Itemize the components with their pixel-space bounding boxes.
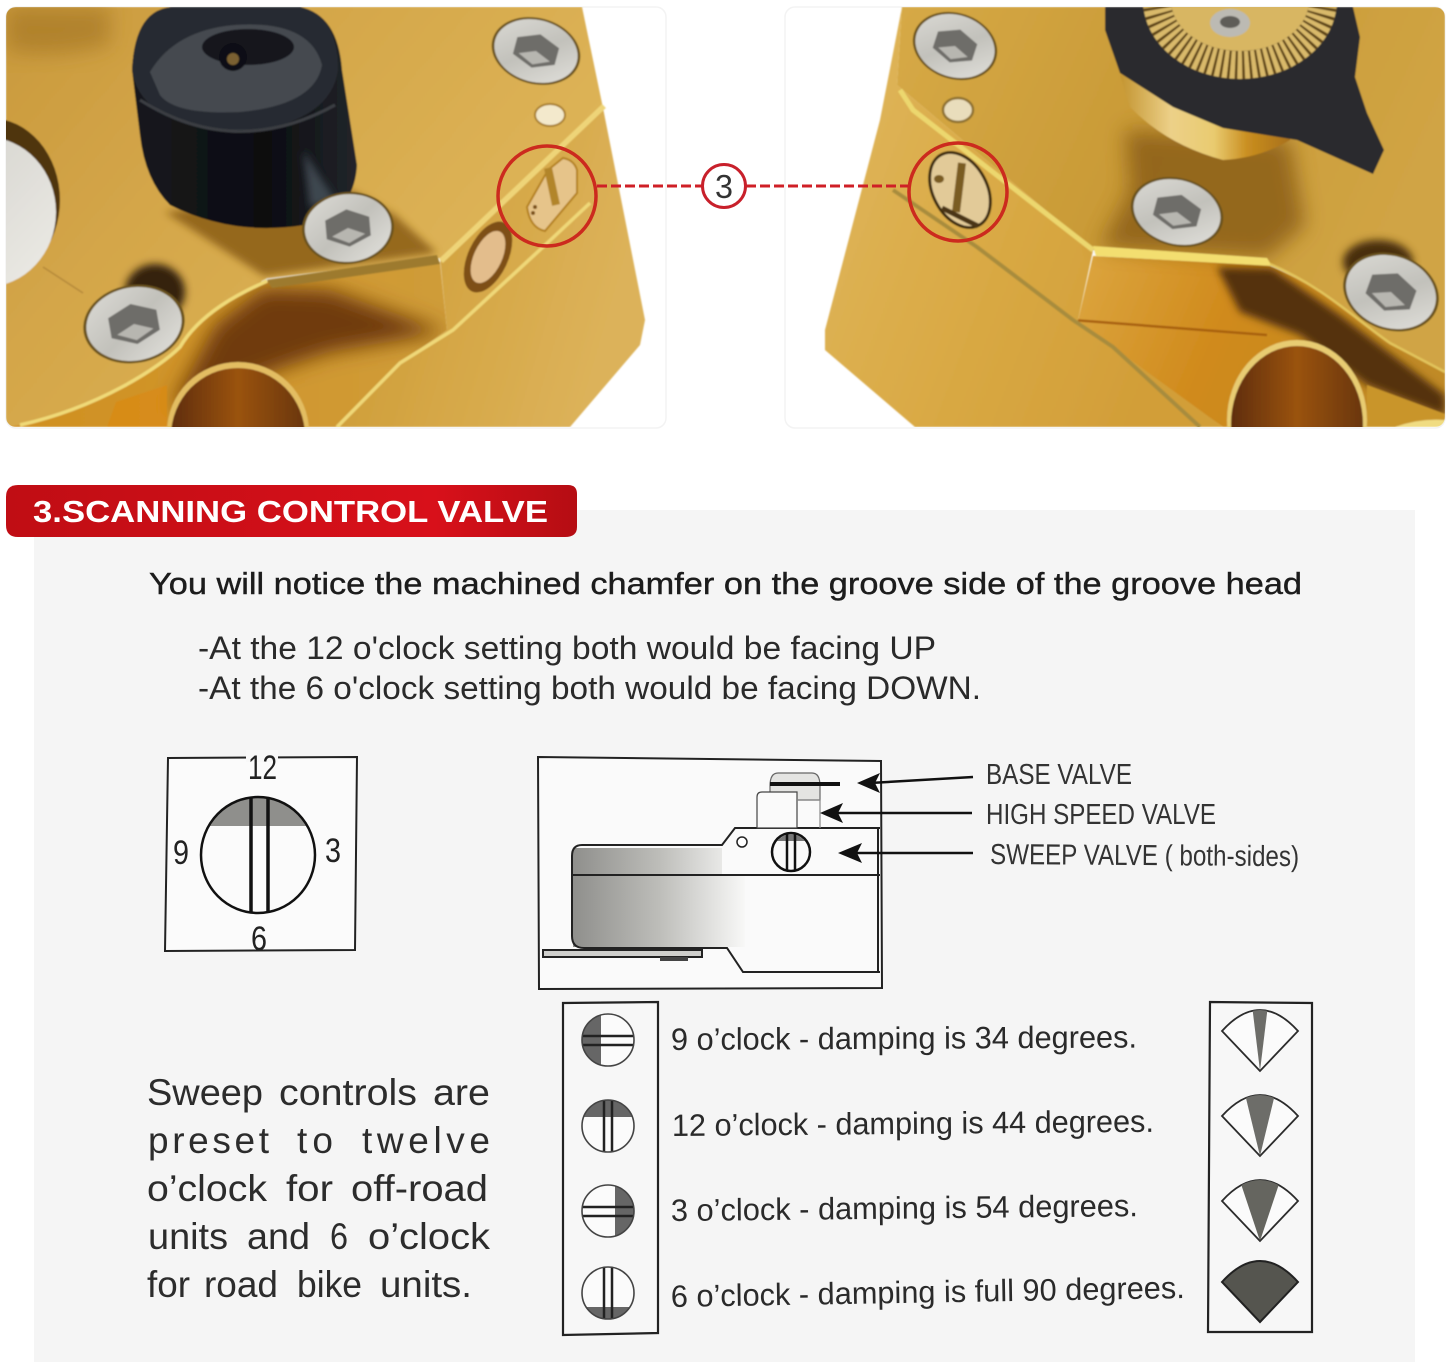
text: damping settings: 3 o’clock - damping is 54 degrees. bbox=[671, 1188, 1138, 1228]
text: sweep control note: units bbox=[148, 1216, 228, 1257]
icon: brass cylinder bbox=[1130, 80, 1290, 161]
text: clock settings bbox=[198, 630, 981, 706]
text: damping settings: 9 o’clock - damping is 34 degrees. bbox=[671, 1020, 1137, 1057]
text: sweep control note: twelve bbox=[362, 1120, 490, 1161]
icon: 12 o'clock slot bbox=[582, 1100, 634, 1152]
text: sweep control note: off-road bbox=[351, 1168, 488, 1209]
diagram: clock dial positions: 6 bbox=[251, 920, 267, 958]
icon: black lever knob bbox=[1105, 7, 1384, 174]
labels: valve names: SWEEP VALVE ( both-sides) bbox=[990, 839, 1299, 873]
text: damping settings bbox=[671, 1020, 1185, 1314]
text: sweep control note: for bbox=[286, 1168, 333, 1209]
text: clock settings: -At the 6 o'clock setting both would be facing DOWN. bbox=[198, 670, 981, 706]
text: chamfer note: You will notice the machined chamfer on the groove side of the groove head bbox=[149, 566, 1302, 601]
text: sweep control note: o’clock bbox=[147, 1168, 268, 1209]
diagram: clock dial positions: 9 bbox=[173, 834, 189, 872]
icon: sweep valve slot left bbox=[527, 158, 577, 231]
icon: right bolt recess bbox=[1343, 240, 1413, 284]
photo: right side of damper bbox=[824, 7, 1445, 427]
lower hole bbox=[166, 360, 310, 427]
labels: valve names bbox=[986, 759, 1299, 873]
icon: 9 o'clock slot bbox=[582, 1014, 634, 1066]
text: damping settings: 6 o’clock - damping is full 90 degrees. bbox=[671, 1270, 1185, 1314]
text: sweep control note: bike bbox=[297, 1264, 362, 1305]
icon: bolt centre bbox=[1130, 176, 1224, 248]
diagram: clock dial positions: 12 bbox=[248, 749, 277, 787]
icon: knurled brass dial bbox=[1157, 0, 1323, 65]
photo card: right white backing bbox=[785, 7, 1445, 428]
icon: lower left bolt recess bbox=[125, 264, 185, 320]
text: sweep control note: units. bbox=[380, 1264, 472, 1305]
icon: 34 degree fan bbox=[1222, 1005, 1298, 1071]
labels: valve names: BASE VALVE bbox=[986, 759, 1132, 791]
labels: valve names: HIGH SPEED VALVE bbox=[986, 799, 1216, 831]
icon: 90 degree fan bbox=[1222, 1261, 1298, 1322]
text: sweep control note: 6 bbox=[330, 1216, 348, 1257]
diagram: damper side view bbox=[538, 757, 882, 989]
text: sweep control note: and bbox=[247, 1216, 310, 1257]
text: sweep control note: o’clock bbox=[368, 1216, 491, 1257]
arrow: sweep valve bbox=[838, 843, 973, 863]
diagram: clock dial positions: 3 bbox=[325, 832, 341, 870]
arrow: base valve bbox=[857, 773, 973, 793]
legend: slot position icons bbox=[563, 1002, 658, 1335]
text: sweep control note: are bbox=[433, 1072, 490, 1113]
heading: section banner: 3.SCANNING CONTROL VALVE bbox=[33, 494, 548, 529]
heading: section banner bbox=[6, 485, 577, 537]
text: clock settings: -At the 12 o'clock setting both would be facing UP bbox=[198, 630, 936, 666]
arrow: high speed valve bbox=[820, 803, 972, 823]
icon: bolt top left bbox=[912, 11, 998, 81]
icon: bolt top right bbox=[491, 16, 581, 86]
high speed valve block bbox=[757, 792, 797, 828]
sweep valve dial bbox=[772, 833, 810, 871]
text: sweep control note: Sweep bbox=[147, 1072, 263, 1113]
icon: hex port bbox=[463, 220, 513, 294]
icon: bolt lower left bbox=[82, 284, 186, 364]
legend: damping fan icons bbox=[1208, 1002, 1312, 1332]
icon: 6 o'clock slot bbox=[582, 1267, 634, 1321]
icon: 54 degree fan bbox=[1222, 1175, 1298, 1241]
plate under the body bbox=[543, 950, 702, 957]
icon: gold pin bbox=[535, 104, 565, 126]
photo: left side of damper bbox=[6, 7, 646, 427]
text: damping settings: 12 o’clock - damping is 44 degrees. bbox=[672, 1104, 1154, 1143]
text: sweep control note: preset bbox=[148, 1120, 270, 1161]
silver bore bbox=[6, 119, 61, 240]
photo card: left white backing bbox=[6, 7, 666, 428]
icon: 3 o'clock slot bbox=[582, 1185, 634, 1237]
icon: sweep valve slot right bbox=[927, 150, 993, 230]
callout: number 3 with dashed leader lines: 3 bbox=[715, 168, 733, 205]
icon: 44 degree fan bbox=[1222, 1090, 1298, 1156]
text: sweep control note: to bbox=[297, 1120, 333, 1161]
callout: number 3 with dashed leader lines bbox=[498, 143, 1007, 246]
text: sweep control note: road bbox=[204, 1264, 278, 1305]
icon: lower hole bbox=[1226, 339, 1368, 427]
icon: bolt right bbox=[1342, 252, 1440, 332]
text: sweep control note bbox=[147, 1072, 491, 1305]
text: sweep control note: controls bbox=[279, 1072, 417, 1113]
base valve knob bbox=[770, 773, 820, 800]
diagram: clock dial positions bbox=[165, 749, 357, 958]
icon: black knob bbox=[132, 7, 357, 228]
panel: valve instructions background bbox=[34, 510, 1415, 1362]
text: sweep control note: for bbox=[147, 1264, 190, 1305]
icon: bolt middle bbox=[302, 191, 394, 265]
icon: gold pin right bbox=[943, 98, 973, 122]
